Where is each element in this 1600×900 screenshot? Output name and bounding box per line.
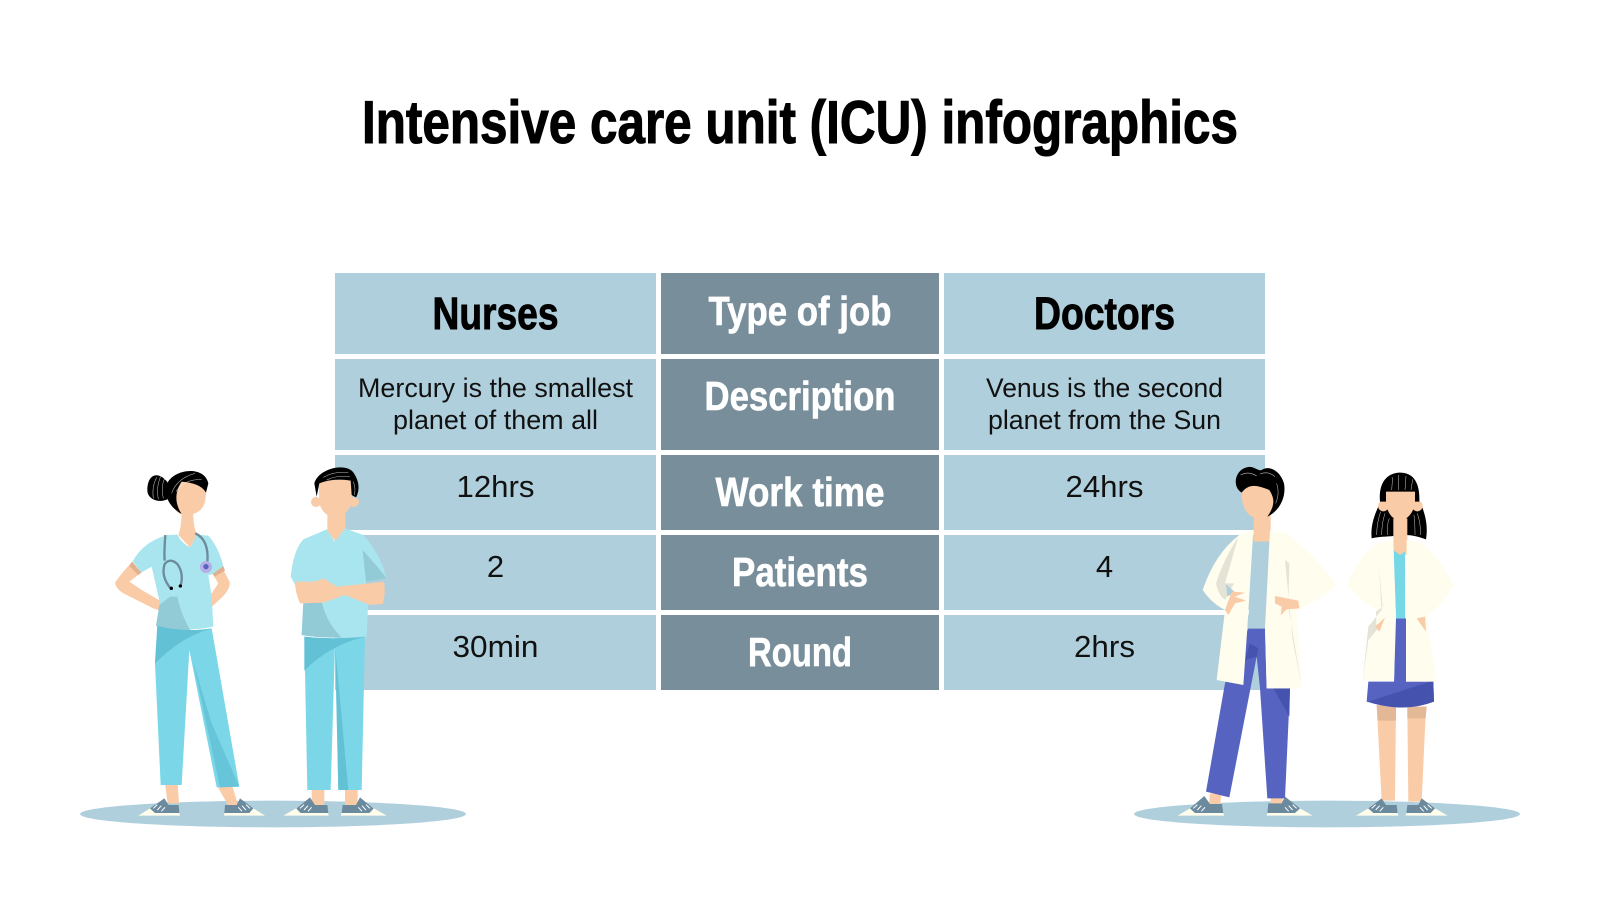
panel: nurses column: 2 [487,549,504,584]
panel: nurses column: 12hrs [456,469,534,504]
floor shadow: doctors [1134,801,1520,827]
panel: nurses column: Mercury is the smallest [358,373,633,403]
panel: row labels column: Type of job [708,288,892,334]
panel: row labels column: Patients [732,549,868,595]
figure: female doctor [1347,473,1453,816]
illustration: doctors [1134,467,1520,827]
figure: male doctor [1178,467,1337,816]
panel: row labels column: Round [748,629,852,675]
panel: nurses column: Nurses [432,288,558,339]
panel: row labels column: Work time [716,469,884,515]
panel: doctors column [944,273,1265,690]
panel: nurses column [335,273,656,690]
panel: doctors column: planet from the Sun [988,405,1221,435]
panel: doctors column: Venus is the second [986,373,1223,403]
panel: doctors column: 2hrs [1074,629,1135,664]
table [335,273,1265,690]
figure: male nurse [283,467,387,816]
panel: doctors column: 24hrs [1066,469,1144,504]
panel: doctors column: Doctors [1034,288,1175,339]
panel: nurses column: 30min [452,629,538,664]
figure: female nurse [115,471,265,816]
illustration: nurses [80,467,466,827]
title: Intensive care unit (ICU) infographics [362,89,1238,156]
panel: nurses column: planet of them all [393,405,598,435]
floor shadow: nurses [80,801,466,827]
panel: row labels column [661,273,939,690]
panel: doctors column: 4 [1096,549,1113,584]
panel: row labels column: Description [704,373,896,419]
